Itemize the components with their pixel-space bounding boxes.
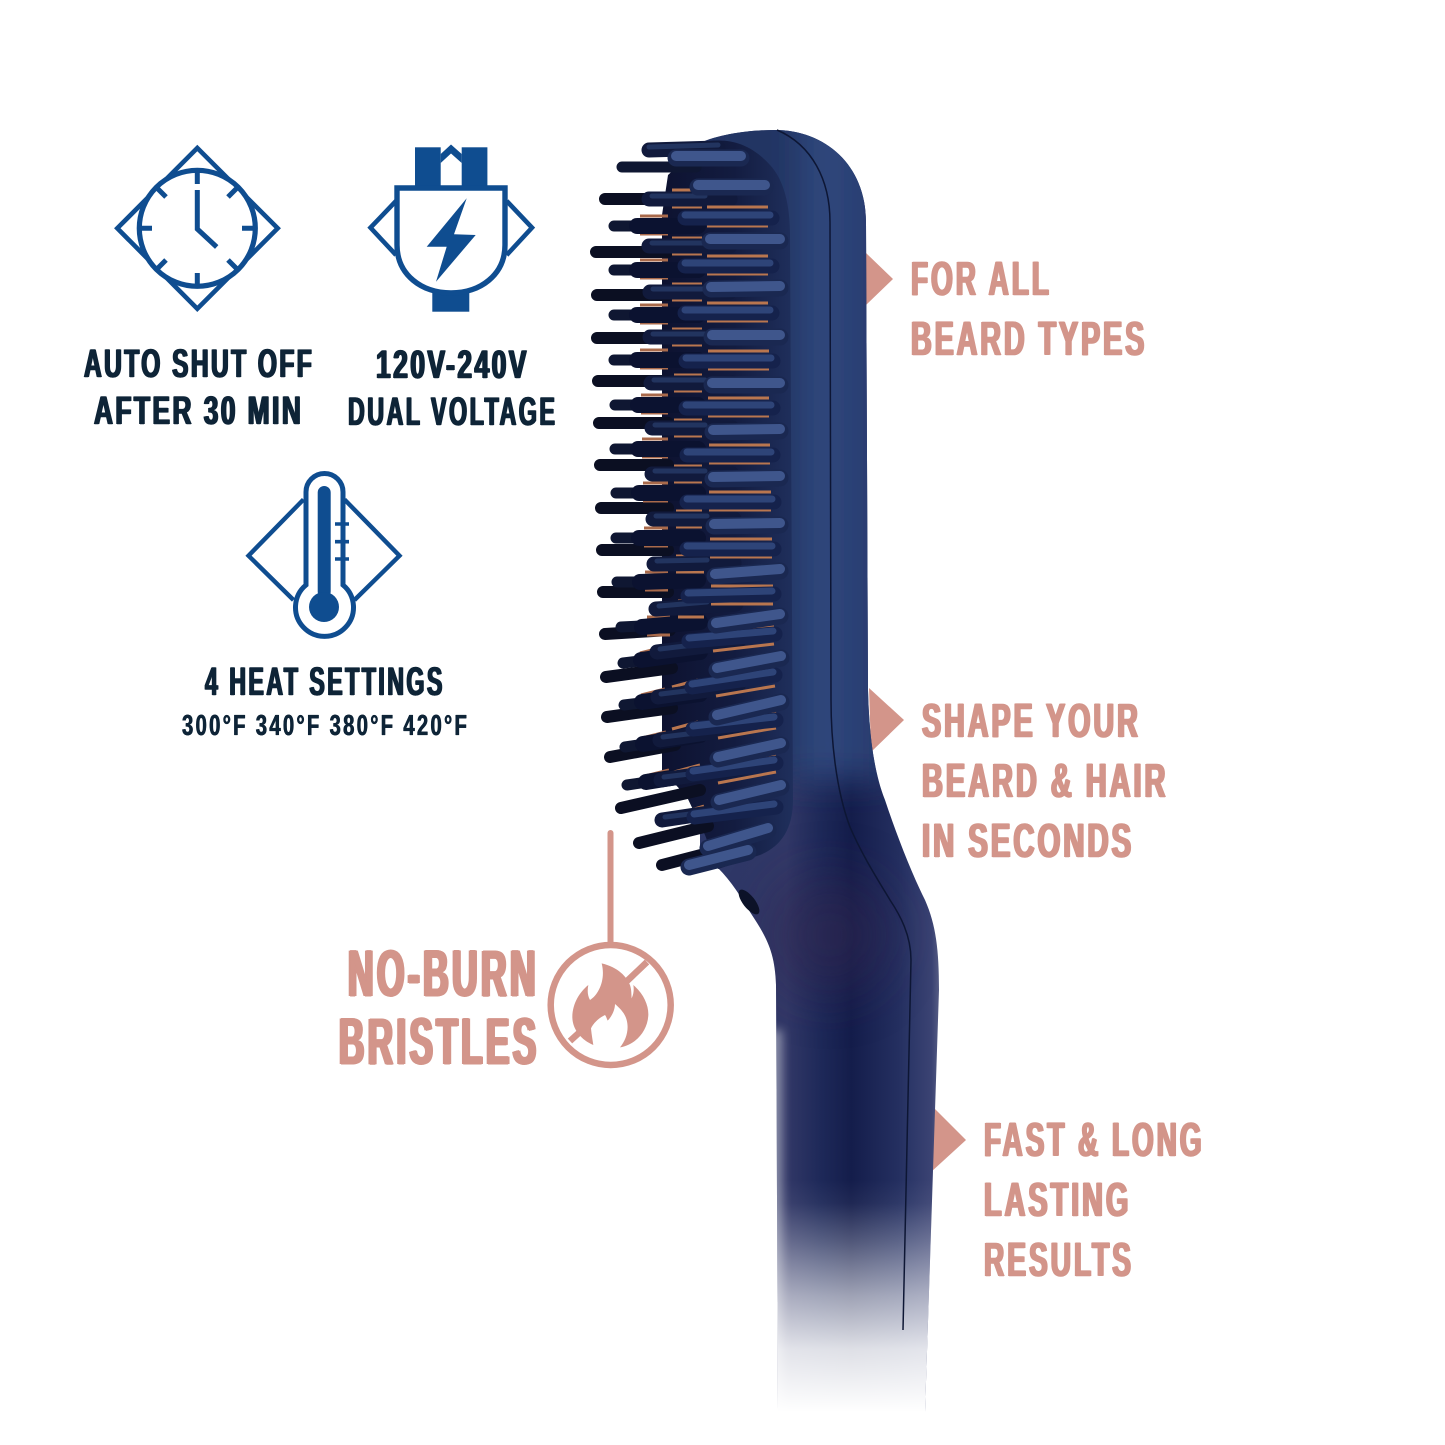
copper plates left: [640, 216, 670, 776]
bristles: front thin column: [685, 218, 776, 817]
hole in the neck: [735, 886, 763, 918]
copper plates right: [707, 207, 776, 783]
bristle plate: [662, 141, 793, 869]
text: auto shut off: [84, 342, 314, 433]
text: dual voltage: [348, 343, 557, 434]
label: fast and long lasting results: RESULTS: [984, 1234, 1134, 1287]
label: shape your beard and hair: [922, 695, 1168, 868]
text: heat settings: 4 HEAT SETTINGS: [205, 660, 445, 704]
label: for all beard types: BEARD TYPES: [911, 313, 1147, 366]
label: no-burn bristles: NO-BURN: [348, 936, 539, 1010]
label: fast and long lasting results: [984, 1114, 1205, 1287]
arrow: shape your beard: [869, 688, 904, 752]
bristles: dark column bodies: [637, 226, 702, 782]
icon: thermometer: [248, 474, 400, 636]
label: fast and long lasting results: LASTING: [984, 1174, 1131, 1227]
text: dual voltage: 120V-240V: [376, 343, 529, 387]
bristles: far black column: [596, 199, 720, 865]
label: shape your beard and hair: IN SECONDS: [922, 815, 1134, 868]
text: heat settings: [182, 660, 469, 742]
icon: clock with auto shut off: [117, 148, 278, 309]
icon: plug with lightning bolt: [370, 144, 532, 312]
product: beard brush: [596, 60, 950, 1430]
text: heat settings: 300°F 340°F 380°F 420°F: [182, 710, 469, 742]
bristles: mid column: [649, 148, 742, 820]
label: for all beard types: FOR ALL: [911, 253, 1052, 306]
handle seam: [777, 130, 911, 1330]
icon: no-burn flame: [551, 945, 671, 1065]
copper plates middle: [672, 190, 704, 814]
label: no-burn bristles: BRISTLES: [339, 1004, 540, 1078]
arrow: fast and long lasting: [931, 1108, 966, 1172]
arrow: for all beard types: [866, 253, 893, 305]
label: fast and long lasting results: FAST & LONG: [984, 1114, 1205, 1167]
label: shape your beard and hair: BEARD & HAIR: [922, 755, 1168, 808]
leader line to bristles: [608, 833, 614, 942]
text: auto shut off: AUTO SHUT OFF: [84, 342, 314, 386]
bristles: dark column tips: [614, 167, 696, 785]
label: no-burn bristles: [339, 936, 540, 1078]
text: auto shut off: AFTER 30 MIN: [94, 389, 303, 433]
label: shape your beard and hair: SHAPE YOUR: [922, 695, 1141, 748]
brush body: [700, 130, 939, 1411]
text: dual voltage: DUAL VOLTAGE: [348, 390, 557, 434]
label: for all beard types: [911, 253, 1147, 366]
bristles: front wide column: [676, 158, 781, 867]
